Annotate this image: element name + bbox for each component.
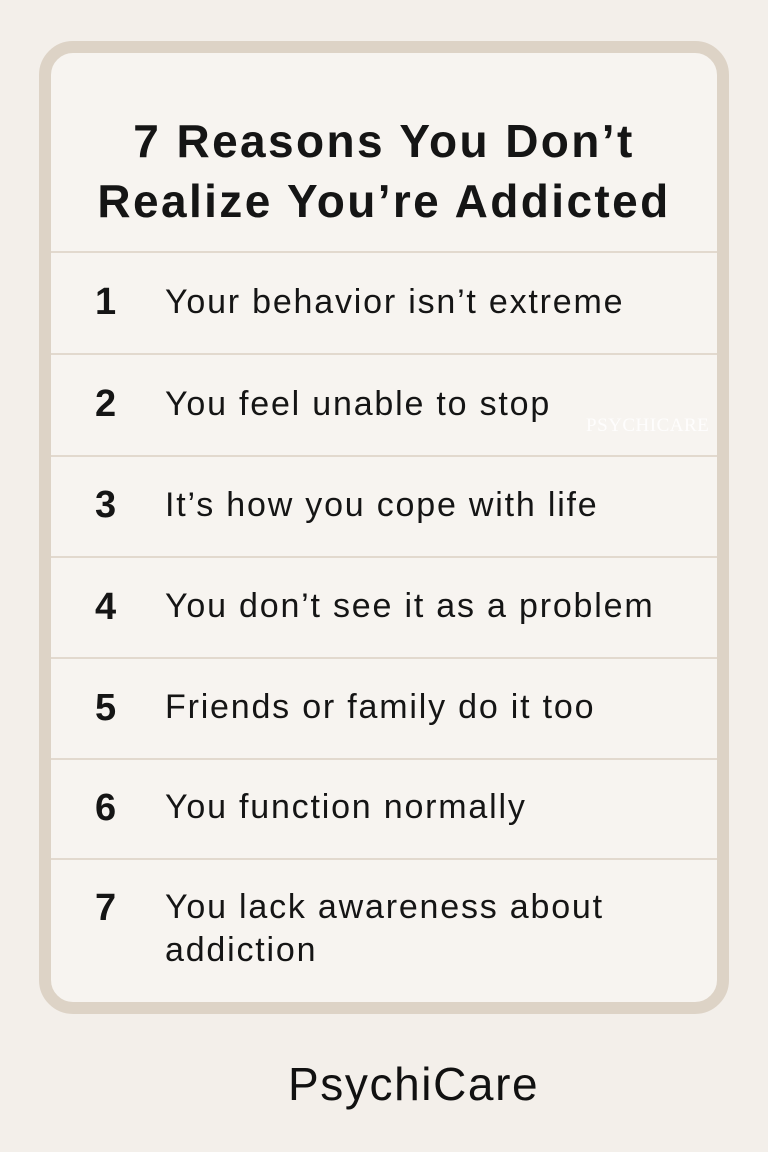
row 6: You function normally bbox=[165, 788, 527, 826]
row 5: Friends or family do it too bbox=[165, 688, 595, 726]
row 5: 5 bbox=[95, 687, 116, 729]
title: 7 Reasons You Don’t bbox=[133, 115, 635, 167]
title: Realize You’re Addicted bbox=[97, 175, 671, 227]
title bbox=[97, 115, 671, 227]
row 7 bbox=[95, 887, 604, 969]
row 4: 4 bbox=[95, 586, 116, 628]
row 1: Your behavior isn’t extreme bbox=[165, 283, 624, 321]
row 2: 2 bbox=[95, 383, 116, 425]
row 6: 6 bbox=[95, 787, 116, 829]
watermark: PSYCHICARE bbox=[586, 415, 709, 436]
row 1: 1 bbox=[95, 281, 116, 323]
row 7: You lack awareness about bbox=[165, 888, 604, 926]
card panel bbox=[39, 41, 729, 1014]
row 2: You feel unable to stop bbox=[165, 385, 551, 423]
row 7: 7 bbox=[95, 887, 116, 929]
row 3: It’s how you cope with life bbox=[165, 486, 599, 524]
row 7: addiction bbox=[165, 931, 317, 969]
logo: PsychiCare bbox=[288, 1058, 539, 1110]
row 3: 3 bbox=[95, 484, 116, 526]
row 4: You don’t see it as a problem bbox=[165, 587, 654, 625]
